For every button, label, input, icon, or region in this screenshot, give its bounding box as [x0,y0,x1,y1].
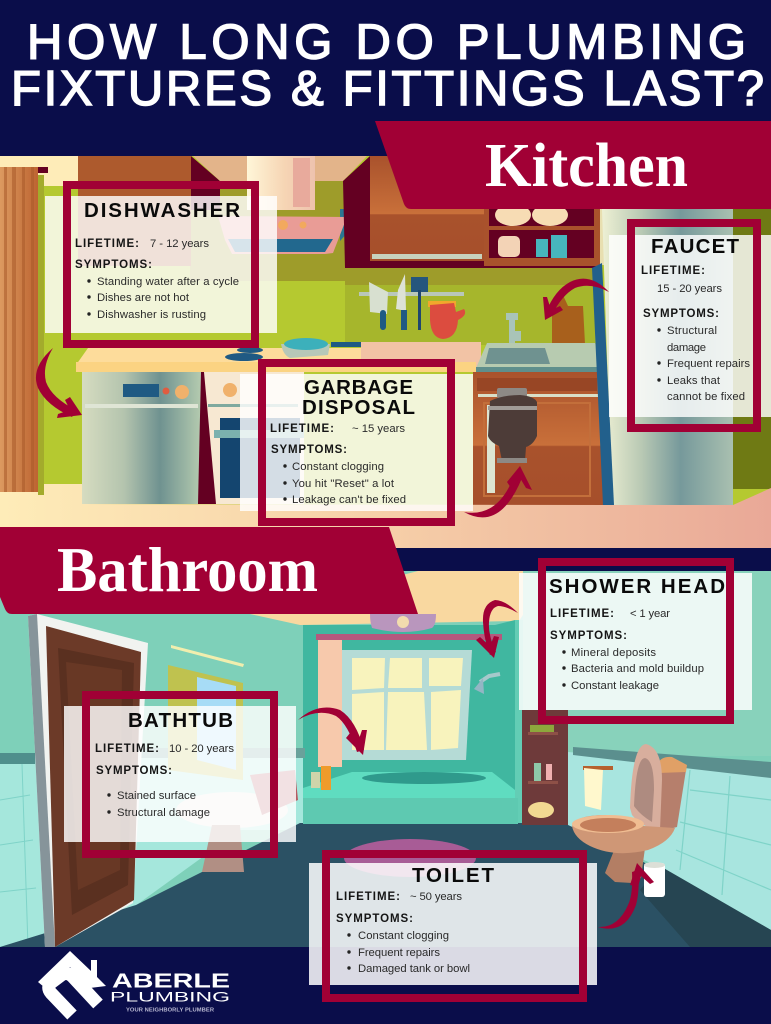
logo tagline: YOUR NEIGHBORLY PLUMBER [126,1008,215,1014]
dishwasher [82,372,202,504]
symptoms: Standing water after a cycle [97,276,239,288]
arrow: to toilet [598,863,654,929]
oven [198,372,304,504]
sink [176,770,298,872]
icon: oven mitt [428,301,465,339]
lifetime [336,891,462,903]
icon: house and pipe logo [38,951,106,1015]
heading: garbage disposal: DISPOSAL [302,396,415,419]
symptoms: Frequent repairs [358,947,440,959]
lifetime: ~ 50 years [410,891,462,903]
towel [583,766,613,810]
heading: garbage disposal [302,376,415,419]
lifetime: LIFETIME: [550,608,614,620]
banner: navy strip below kitchen [0,548,771,571]
curtain [0,167,48,495]
cutting board [552,293,585,344]
lifetime [641,265,722,295]
panel: faucet [609,223,771,428]
floor [0,484,771,548]
shower curtain [318,640,342,767]
symptoms: SYMPTOMS: [96,765,172,777]
lifetime: 7 - 12 years [150,238,209,250]
arrow: to dishwasher [36,348,82,418]
symptoms: SYMPTOMS: [643,308,719,320]
counter tops [76,342,481,372]
symptoms [96,765,210,819]
symptoms: Structural [667,325,717,337]
heading: shower head: SHOWER HEAD [549,575,725,598]
lifetime [270,423,405,435]
panel: bathtub [64,695,296,854]
sink [476,343,606,372]
floor [0,823,771,947]
lifetime: 10 - 20 years [169,743,234,755]
lifetime [75,238,209,250]
lifetime: LIFETIME: [270,423,334,435]
symptoms [336,913,470,975]
heading: dishwasher: DISHWASHER [84,199,240,222]
heading: Kitchen: Kitchen [485,132,688,200]
left upper cabinet [78,156,191,266]
lifetime: LIFETIME: [641,265,705,277]
bathroom door [28,614,148,947]
symptoms: Frequent repairs [667,358,750,370]
heading: faucet: FAUCET [651,235,739,258]
range hood [193,156,369,254]
symptoms: Dishwasher is rusting [97,309,206,321]
icon: toilet paper roll [644,862,665,897]
symptoms: Mineral deposits [571,647,656,659]
symptoms: SYMPTOMS: [550,630,627,642]
symptoms: damage [667,342,706,354]
symptoms [643,308,750,403]
symptoms [271,444,406,506]
logo: Aberle Plumbing [38,951,230,1015]
window [342,650,472,760]
panel: toilet [309,854,597,998]
upper cabinets and shelves [343,156,612,268]
symptoms: SYMPTOMS: [271,444,347,456]
title: FIXTURES & FITTINGS LAST? [11,62,764,116]
mirror [168,645,244,780]
lifetime: LIFETIME: [75,238,139,250]
knives and utensils rail [359,274,464,330]
lifetime: LIFETIME: [336,891,400,903]
arrow: to garbage disposal [464,466,532,517]
symptoms: SYMPTOMS: [336,913,413,925]
symptoms [75,259,239,321]
symptoms: Constant clogging [292,461,384,473]
lifetime: 15 - 20 years [657,283,722,295]
ceiling [250,571,552,625]
heading: toilet: TOILET [412,864,494,887]
lifetime [550,608,670,620]
lifetime [95,743,234,755]
symptoms: Leaks that [667,375,721,387]
right wall tile [568,747,771,947]
section banner: Kitchen [375,121,771,209]
symptoms: SYMPTOMS: [75,259,152,271]
symptoms: cannot be fixed [667,391,745,403]
symptoms: Dishes are not hot [97,292,190,304]
symptoms: Bacteria and mold buildup [571,663,704,675]
symptoms: Structural damage [117,807,210,819]
symptoms: Constant leakage [571,680,659,692]
icon: toilet [572,744,687,883]
logo wordmark: ABERLE [112,970,230,992]
heading: Bathroom: Bathroom [57,534,318,605]
pan and stove [225,338,361,361]
heading: garbage disposal: GARBAGE [304,376,413,399]
title [11,16,764,116]
symptoms [550,630,704,692]
lifetime: ~ 15 years [352,423,405,435]
ceiling lamp [370,614,436,632]
logo wordmark second line: PLUMBING [110,988,230,1004]
rug [344,839,476,877]
title: HOW LONG DO PLUMBING [27,16,746,70]
section banner: Bathroom [0,527,418,614]
icon: shower head fixture [474,674,500,694]
side wall and fridge [592,209,771,505]
panel: garbage disposal [240,363,473,522]
left wall tile [0,748,305,947]
arrow: to bathtub [298,708,367,755]
lower cabinet [473,372,605,505]
symptoms: Constant clogging [358,930,449,942]
symptoms: You hit "Reset" a lot [292,478,395,490]
curtain rod [316,634,502,640]
panel: shower head [519,562,752,720]
lifetime: < 1 year [630,608,670,620]
panel: dishwasher [45,185,277,344]
bathtub [303,766,518,824]
lifetime: LIFETIME: [95,743,159,755]
garbage disposal [488,388,537,463]
arrow: to shower head [476,600,518,658]
heading: bathtub: BATHTUB [128,709,233,732]
symptoms: Damaged tank or bowl [358,963,470,975]
symptoms: Stained surface [117,790,196,802]
illustration: kitchen scene [0,156,771,548]
arrow: to faucet [543,279,609,320]
shelf unit [522,710,568,825]
symptoms: Leakage can't be fixed [292,494,406,506]
faucet [506,313,521,344]
illustration: bathroom scene [0,571,771,947]
footer band [0,947,771,1024]
